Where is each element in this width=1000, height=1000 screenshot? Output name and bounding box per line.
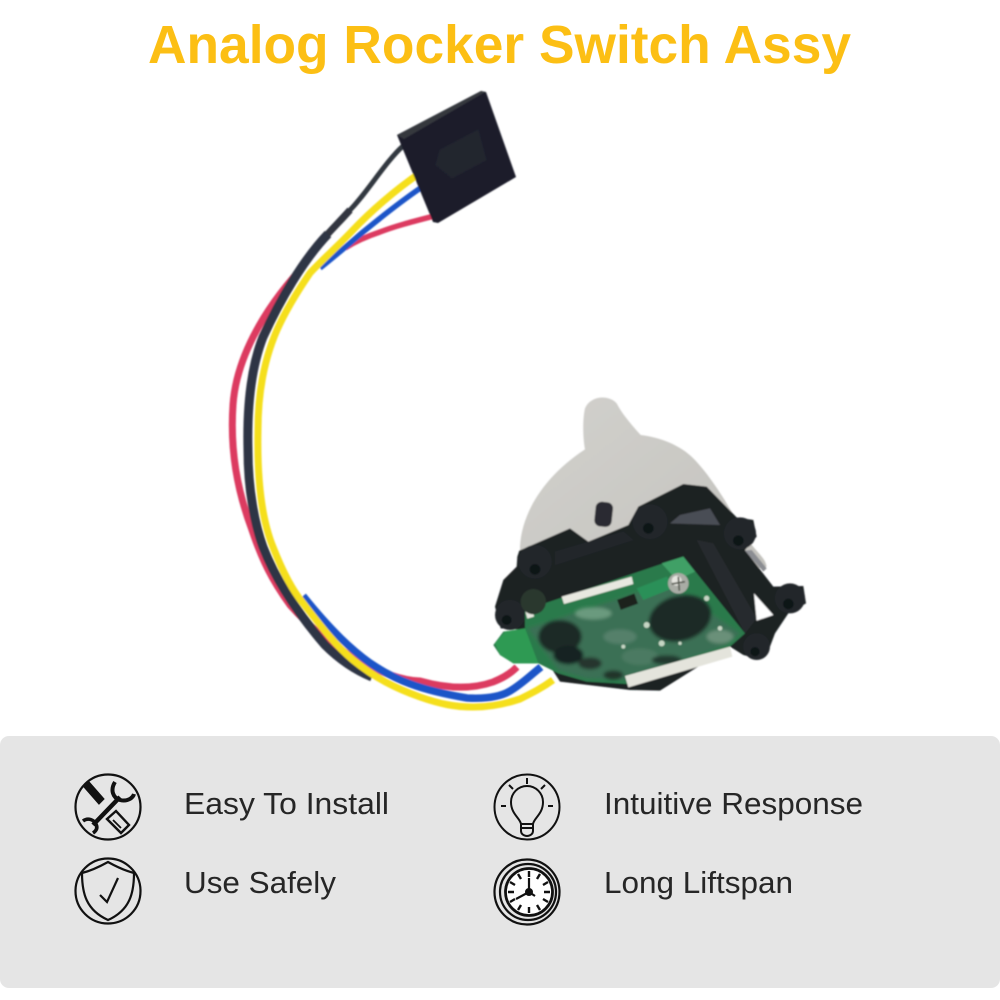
frame window	[670, 508, 720, 525]
icon: tools	[76, 774, 140, 840]
red wire lower	[232, 270, 517, 687]
circuit board	[493, 557, 745, 687]
red wire upper	[345, 215, 438, 248]
frame bosses	[495, 504, 805, 660]
label: intuitive response: Intuitive Response	[604, 786, 863, 821]
wire harness	[232, 146, 553, 707]
frame side wall	[697, 540, 757, 633]
knob indicator slot	[594, 501, 614, 528]
black wire middle	[325, 210, 350, 237]
solder points	[621, 596, 722, 649]
icon: shield with check	[76, 858, 140, 924]
grey rocker knob	[520, 397, 767, 593]
blue wire upper	[320, 187, 422, 268]
product photo: wiring harness and connector	[232, 91, 553, 707]
panel: features	[0, 736, 1000, 988]
icon: clock	[494, 860, 560, 924]
black mounting frame	[495, 484, 806, 691]
frame cut-out	[754, 593, 773, 621]
icon: light bulb	[494, 774, 560, 840]
label: use safely: Use Safely	[184, 865, 336, 900]
blue wire lower	[303, 596, 541, 698]
title: Analog Rocker Switch Assy	[148, 15, 851, 75]
yellow wire	[258, 173, 553, 707]
label: easy to install: Easy To Install	[184, 786, 389, 821]
black wire lower	[248, 234, 372, 677]
black wire top	[348, 146, 403, 212]
connector housing	[397, 91, 516, 223]
board surface mottling	[528, 583, 740, 680]
switch assembly	[493, 397, 806, 691]
white strips	[562, 577, 633, 604]
mounting screw	[668, 573, 689, 594]
label: long lifespan: Long Liftspan	[604, 865, 793, 900]
